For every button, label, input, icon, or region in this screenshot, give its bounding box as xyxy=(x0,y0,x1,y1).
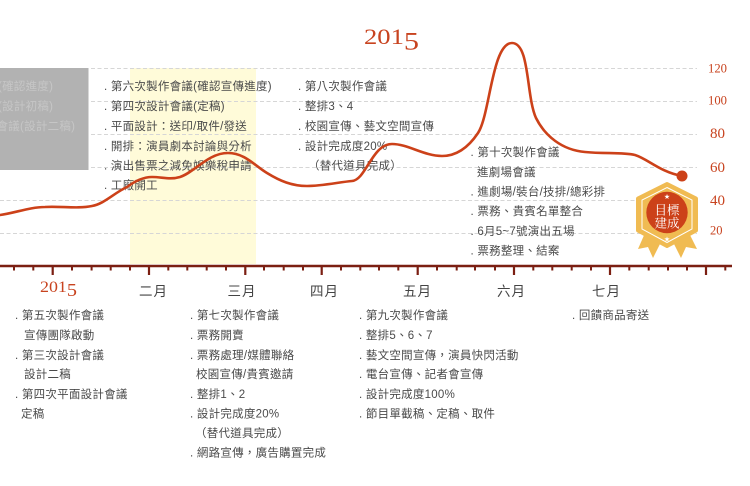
grey faded panel xyxy=(0,68,88,170)
badge: goal achieved: ★ xyxy=(664,193,670,201)
panel: February tasks below the axis: 宣傳團隊啟動 xyxy=(24,328,94,342)
panel: June tasks above the axis: . 第十次製作會議 xyxy=(470,145,560,159)
panel: April tasks above the axis: （替代道具完成） xyxy=(308,158,402,172)
panel: February tasks below the axis: 定稿 xyxy=(21,406,44,420)
title: 2015: 5 xyxy=(404,28,419,56)
panel: March tasks above the axis: . 平面設計：送印/取件/發送 xyxy=(104,119,247,133)
panel: March tasks above the axis: . 工廠開工 xyxy=(104,178,158,192)
panel: March tasks above the axis: . 第四次設計會議(定稿) xyxy=(104,99,225,113)
panel: June tasks above the axis: . 進劇場/裝台/技排/總彩排 xyxy=(470,184,605,198)
panel: March tasks above the axis xyxy=(104,79,272,192)
y axis labels: 80 xyxy=(710,126,725,142)
y axis labels: 120 xyxy=(708,62,727,76)
line chart curve xyxy=(0,43,682,215)
y axis labels: 20 xyxy=(710,224,722,238)
month labels: 五月 xyxy=(403,284,432,299)
panel: March tasks below the axis: （替代道具完成） xyxy=(195,426,289,440)
panel: June tasks above the axis: . 6月5~7號演出五場 xyxy=(470,224,575,238)
panel: March tasks below the axis: . 整排1、2 xyxy=(190,387,245,401)
panel: June tasks above the axis: . 票務、貴賓名單整合 xyxy=(470,204,583,218)
panel: April tasks above the axis xyxy=(298,79,434,172)
panel: May tasks below the axis xyxy=(359,308,519,420)
badge: goal achieved: ★ xyxy=(664,236,670,244)
panel: May tasks below the axis: . 節目單截稿、定稿、取件 xyxy=(359,406,495,420)
panel: March tasks above the axis: . 第六次製作會議(確認宣傳進度) xyxy=(104,79,272,93)
month labels: 二月 xyxy=(139,284,168,299)
timeline axis xyxy=(0,266,732,275)
panel: March tasks below the axis: . 第七次製作會議 xyxy=(190,308,279,322)
panel: April tasks above the axis: . 整排3、4 xyxy=(298,99,354,113)
panel: February tasks below the axis: . 第五次製作會議 xyxy=(15,308,104,322)
y axis labels: 100 xyxy=(708,94,727,108)
title: 2015: 201 xyxy=(364,24,402,49)
panel: April tasks above the axis: . 第八次製作會議 xyxy=(298,79,387,93)
panel: March tasks above the axis: . 演出售票之減免娛樂稅申請 xyxy=(104,158,252,172)
panel: February tasks below the axis xyxy=(15,308,128,420)
y axis labels xyxy=(708,62,727,238)
y axis labels: 40 xyxy=(710,193,725,209)
panel: April tasks above the axis: . 設計完成度20% xyxy=(298,139,387,153)
panel: February tasks below the axis: . 第三次設計會議 xyxy=(15,348,104,362)
panel: May tasks below the axis: . 電台宣傳、記者會宣傳 xyxy=(359,367,484,381)
panel: March tasks below the axis xyxy=(190,308,326,460)
panel: July tasks below the axis: . 回饋商品寄送 xyxy=(572,308,650,322)
badge: goal achieved: 目標 xyxy=(654,203,680,218)
badge: goal achieved: 建成 xyxy=(654,216,680,231)
panel: June tasks above the axis xyxy=(470,145,605,258)
panel: June tasks above the axis: 進劇場會議 xyxy=(477,165,536,179)
month labels: 三月 xyxy=(228,284,256,299)
panel: March tasks below the axis: . 設計完成度20% xyxy=(190,406,279,420)
badge: goal achieved xyxy=(638,184,697,258)
month labels: 5 xyxy=(67,280,77,300)
panel: March tasks below the axis: . 票務處理/媒體聯絡 xyxy=(190,348,295,362)
y axis labels: 60 xyxy=(710,160,725,176)
panel: April tasks above the axis: . 校園宣傳、藝文空間宣傳 xyxy=(298,119,434,133)
month labels: 七月 xyxy=(592,284,621,299)
panel: May tasks below the axis: . 整排5、6、7 xyxy=(359,328,433,342)
panel: March tasks below the axis: . 票務開賣 xyxy=(190,328,244,342)
month labels: 六月 xyxy=(497,284,526,299)
panel: June tasks above the axis: . 票務整理、結案 xyxy=(470,244,560,258)
panel: February tasks below the axis: . 第四次平面設計會議 xyxy=(15,387,128,401)
month labels: 四月 xyxy=(310,284,339,299)
month labels xyxy=(40,279,621,300)
yellow highlighted period band xyxy=(130,68,256,264)
panel: May tasks below the axis: . 第九次製作會議 xyxy=(359,308,448,322)
panel: March tasks above the axis: . 開排：演員劇本討論與分析 xyxy=(104,139,252,153)
panel: February tasks below the axis: 設計二稿 xyxy=(24,367,71,381)
panel: May tasks below the axis: . 設計完成度100% xyxy=(359,387,455,401)
month labels: 201 xyxy=(40,279,66,296)
chart end point xyxy=(676,170,688,182)
panel: March tasks below the axis: . 網路宣傳，廣告購置完成 xyxy=(190,446,326,460)
panel: May tasks below the axis: . 藝文空間宣傳，演員快閃活動 xyxy=(359,348,519,362)
panel: March tasks below the axis: 校園宣傳/貴賓邀請 xyxy=(196,367,294,381)
